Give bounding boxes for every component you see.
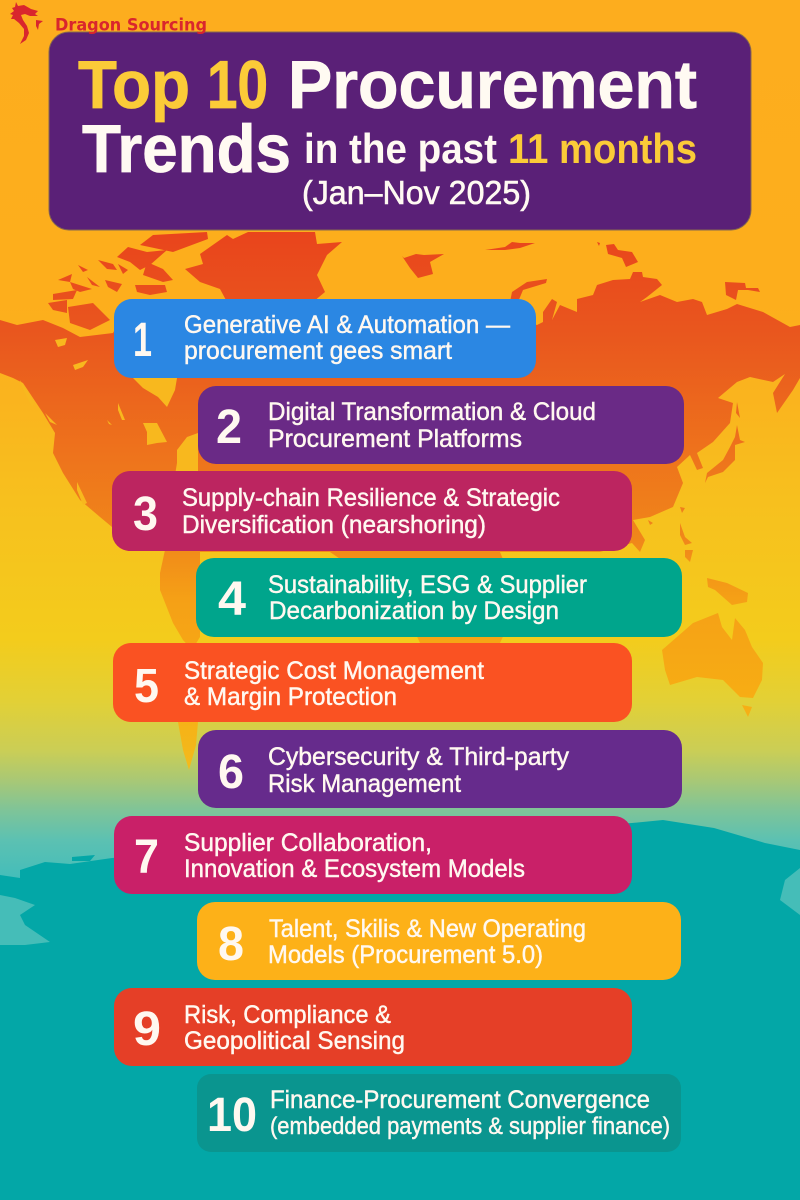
panel: title <box>49 32 751 230</box>
card 4: Sustainability, ESG & Supplier <box>268 571 587 599</box>
card 6: Cybersecurity & Third-party <box>268 743 569 771</box>
subheading: 11 months: 11 months <box>508 125 697 172</box>
card 8 <box>197 902 681 980</box>
card 10: Finance-Procurement Convergence <box>270 1086 650 1114</box>
card 2 <box>198 386 684 464</box>
card 6 <box>198 730 682 808</box>
heading: 10: 10 <box>207 47 268 123</box>
card 3: Diversification (nearshoring) <box>182 511 486 539</box>
card 1: Generative AI & Automation — <box>184 311 510 339</box>
card 2: 2 <box>216 401 242 454</box>
logo: Dragon Sourcing <box>10 2 207 44</box>
card 10: (embedded payments & supplier finance) <box>270 1113 670 1140</box>
brand name: Dragon Sourcing <box>55 16 207 36</box>
card 2: Procurement Platforms <box>268 425 522 453</box>
card 9: Risk, Compliance & <box>184 1001 391 1029</box>
card 9 <box>114 988 632 1066</box>
card 6: Risk Management <box>268 770 461 798</box>
card 3: 3 <box>133 488 158 541</box>
card 8: Talent, Skilis & New Operating <box>269 915 586 943</box>
card 8: 8 <box>218 918 244 971</box>
card 3 <box>112 471 632 551</box>
card 9: 9 <box>133 1003 161 1056</box>
subheading: in the past: in the past <box>304 125 497 172</box>
heading: Procurement: Procurement <box>288 47 697 123</box>
date range: (Jan–Nov 2025) <box>302 174 531 211</box>
card 6: 6 <box>218 746 244 799</box>
card 10: 10 <box>207 1089 257 1142</box>
card 4: Decarbonization by Design <box>269 597 559 625</box>
card 9: Geopolitical Sensing <box>184 1027 405 1055</box>
antarctica silhouette <box>0 820 800 1200</box>
card 8: Models (Procurement 5.0) <box>268 941 543 969</box>
world map <box>0 232 800 770</box>
heading: Top: Top <box>78 47 190 123</box>
card 4 <box>196 558 682 637</box>
card 7: Innovation & Ecosystem Models <box>184 855 525 883</box>
card 7: 7 <box>134 831 159 884</box>
card 7: Supplier Collaboration, <box>184 829 432 857</box>
card 10 <box>197 1074 681 1152</box>
heading: Trends: Trends <box>82 111 291 187</box>
lakes and inlets in the map <box>20 338 198 505</box>
card 5: Strategic Cost Monagement <box>184 657 484 685</box>
icon: dragon <box>10 2 43 44</box>
card 5: 5 <box>134 660 159 713</box>
card 3: Supply-chain Resilience & Strategic <box>182 484 560 512</box>
card 1 <box>114 299 536 378</box>
card 2: Digital Transformation & Cloud <box>268 398 596 426</box>
card 4: 4 <box>218 573 246 626</box>
card 5: & Margin Protection <box>184 683 397 711</box>
card 1: procurement gees smart <box>184 337 452 365</box>
card 1: 1 <box>133 314 152 367</box>
card 5 <box>113 643 632 722</box>
card 7 <box>114 816 632 894</box>
